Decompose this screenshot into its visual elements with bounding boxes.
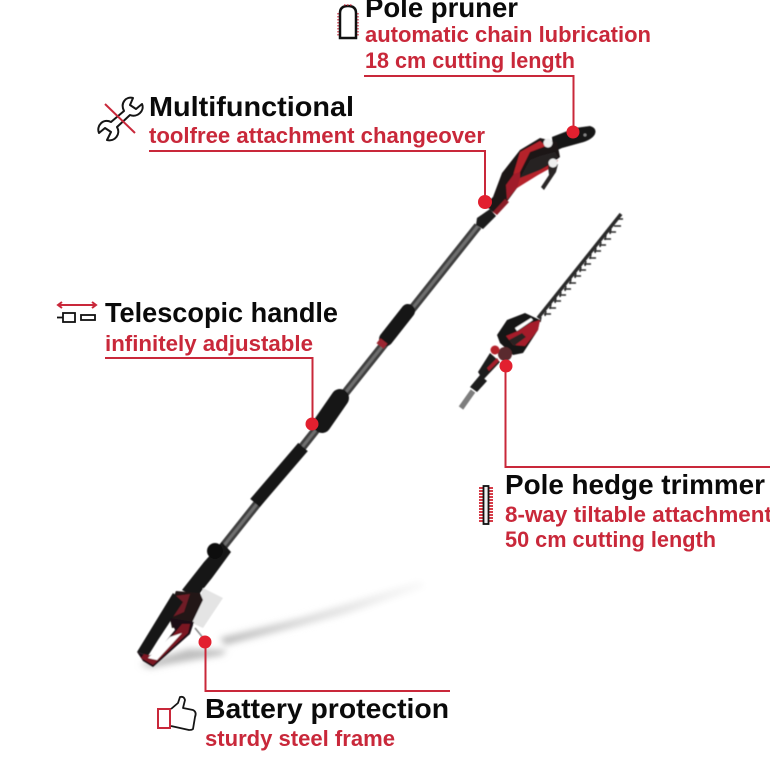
leader line xyxy=(105,358,312,424)
middle grip xyxy=(322,398,340,424)
hedge trimmer attachment xyxy=(461,214,623,408)
heading: Battery protection xyxy=(205,693,449,724)
trigger guard xyxy=(541,164,558,190)
text: feature: sturdy steel frame xyxy=(205,726,395,751)
tilt joint and coupling xyxy=(498,347,512,361)
rear handle and battery housing xyxy=(182,542,231,598)
motor body xyxy=(485,138,560,212)
callout: battery protection xyxy=(158,636,450,751)
pole stub xyxy=(461,391,473,408)
upper grip xyxy=(386,311,408,339)
text: features: 8-way tiltable attachment xyxy=(505,502,770,527)
white knobs xyxy=(544,138,552,148)
text: feature: infinitely adjustable xyxy=(105,331,313,356)
blade xyxy=(538,214,621,318)
callout: multifunctional xyxy=(98,91,492,209)
leader line xyxy=(206,642,450,691)
text: features: 18 cm cutting length xyxy=(365,48,575,73)
ground shadow xyxy=(140,581,425,668)
motor housing and handle xyxy=(497,313,540,355)
callout: pole pruner xyxy=(338,0,651,138)
heading: Pole hedge trimmer xyxy=(505,469,765,500)
leader line xyxy=(364,76,574,132)
text: features: 50 cm cutting length xyxy=(505,527,716,552)
text: features: automatic chain lubrication xyxy=(365,22,651,47)
lower grip xyxy=(255,447,303,503)
heading: Multifunctional xyxy=(149,91,354,122)
pole shaft xyxy=(222,226,478,548)
text: feature: toolfree attachment changeover xyxy=(149,123,485,148)
head collar xyxy=(476,209,496,229)
icon: chain bar xyxy=(338,5,358,38)
marker xyxy=(566,126,580,138)
icon: wrench crossed out xyxy=(98,98,143,140)
marker xyxy=(478,195,492,209)
marker xyxy=(500,360,512,372)
text: features xyxy=(365,22,651,73)
telescopic pole tool xyxy=(137,126,595,667)
leader line xyxy=(149,151,485,202)
icon: extension arrow xyxy=(57,302,96,322)
marker xyxy=(306,418,318,430)
callout: pole hedge trimmer xyxy=(479,360,770,552)
callout: telescopic handle xyxy=(57,297,338,430)
guide bar and chain xyxy=(552,126,595,152)
marker xyxy=(198,636,212,648)
pruner head xyxy=(476,126,595,229)
icon: thumbs up xyxy=(158,697,196,730)
icon: hedge blade xyxy=(479,486,493,524)
leader line xyxy=(506,366,770,467)
text: features xyxy=(505,502,770,552)
heading: Telescopic handle xyxy=(105,297,338,328)
